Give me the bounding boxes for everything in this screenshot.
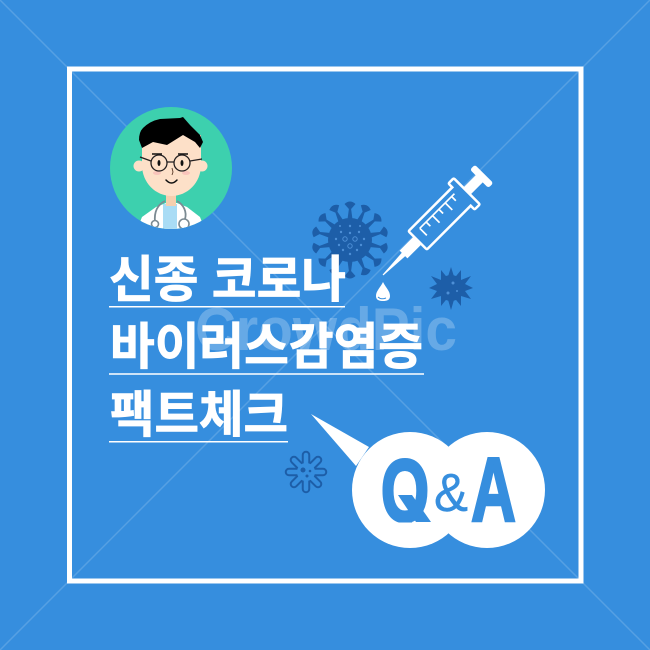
title line 1: 신종 코로나 — [109, 252, 346, 308]
icon: syringe — [370, 161, 497, 288]
icon: large virus — [311, 202, 389, 278]
Q&A label: & — [434, 463, 468, 523]
frame — [70, 69, 581, 581]
title underlines — [109, 307, 424, 442]
speech bubble — [311, 414, 545, 548]
Q&A label: Q — [381, 441, 429, 540]
watermark: CrowdPic — [195, 296, 457, 363]
icon: spiky virus — [429, 267, 473, 310]
title — [109, 252, 423, 443]
icon: outlined virus — [289, 455, 323, 489]
title line 2: 바이러스감염증 — [110, 319, 423, 375]
Q&A label — [382, 457, 516, 522]
Q&A label: A — [471, 440, 516, 541]
icon: doctor avatar — [110, 107, 232, 232]
icon: drop — [376, 282, 390, 301]
title line 3: 팩트체크 — [110, 387, 288, 443]
